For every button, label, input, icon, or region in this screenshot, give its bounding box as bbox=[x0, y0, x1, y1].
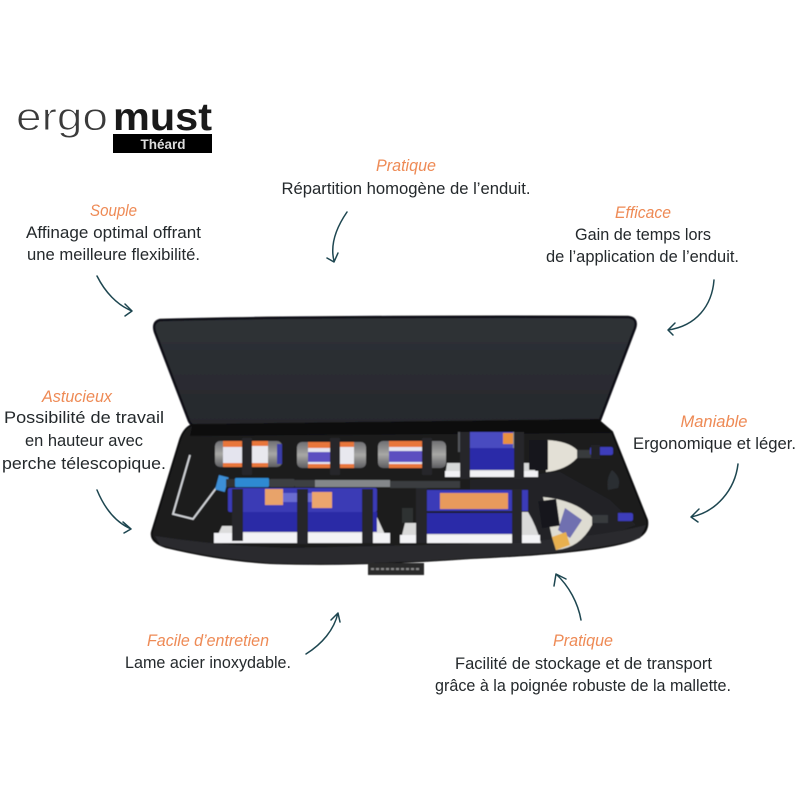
callout: Facile d'entretien: Facile d’entretien bbox=[147, 631, 269, 650]
arrow: Pratique répartition bbox=[327, 212, 347, 262]
arrow: Maniable bbox=[691, 464, 738, 522]
strap loop bbox=[608, 470, 619, 490]
logo: ergomust Théard: ergo bbox=[16, 96, 108, 139]
large spatula bbox=[538, 497, 633, 550]
callout: Efficace: Gain de temps lors bbox=[575, 225, 711, 244]
callout: Maniable: Maniable bbox=[680, 412, 748, 431]
large trowel right bbox=[400, 488, 541, 543]
callout: Souple: Souple bbox=[90, 201, 137, 220]
arrow: Astucieux bbox=[97, 490, 131, 533]
callout: Souple bbox=[26, 201, 201, 264]
logo: ergomust Théard: Théard bbox=[140, 137, 186, 152]
arrow: Pratique stockage bbox=[554, 574, 581, 620]
callout: Astucieux: perche télescopique. bbox=[2, 454, 166, 473]
callout: Pratique répartition: Pratique bbox=[376, 156, 436, 175]
paint rollers bbox=[215, 438, 446, 475]
logo: ergomust Théard: must bbox=[113, 96, 212, 139]
callout: Souple: Affinage optimal offrant bbox=[26, 223, 201, 242]
callout: Facile d'entretien bbox=[125, 631, 291, 672]
callout: Facile d'entretien: Lame acier inoxydable. bbox=[125, 653, 291, 672]
callout: Efficace bbox=[546, 203, 739, 266]
inner lining sheen bbox=[470, 472, 636, 546]
callout: Astucieux: Astucieux bbox=[41, 387, 112, 406]
callout: Souple: une meilleure flexibilité. bbox=[27, 245, 200, 264]
callout: Pratique stockage bbox=[435, 631, 731, 695]
callout: Pratique stockage: Pratique bbox=[553, 631, 613, 650]
callout: Astucieux: Possibilité de travail bbox=[4, 408, 164, 427]
roller frame bbox=[173, 455, 229, 519]
callout: Pratique répartition: Répartition homogène de l’enduit. bbox=[282, 179, 530, 198]
case lid bbox=[154, 317, 636, 427]
small spatula bbox=[529, 440, 613, 472]
small trowel bbox=[445, 432, 538, 479]
hinge band bbox=[190, 421, 612, 436]
callout: Efficace: Efficace bbox=[615, 203, 671, 222]
arrow: Facile d'entretien bbox=[306, 613, 340, 654]
case handle bbox=[368, 563, 424, 575]
front edge bbox=[155, 525, 646, 564]
arrow: Efficace bbox=[668, 280, 714, 335]
case base bbox=[152, 420, 647, 564]
telescopic pole bbox=[226, 478, 460, 488]
callout: Pratique stockage: Facilité de stockage et de transport bbox=[455, 654, 712, 673]
product photo: open tool case bbox=[152, 317, 647, 575]
callout: Astucieux: en hauteur avec bbox=[25, 431, 143, 450]
callout: Pratique stockage: grâce à la poignée robuste de la mallette. bbox=[435, 676, 731, 695]
callout: Maniable bbox=[633, 412, 796, 453]
callout: Maniable: Ergonomique et léger. bbox=[633, 434, 796, 453]
callout: Efficace: de l’application de l’enduit. bbox=[546, 247, 739, 266]
logo: ergomust Théard bbox=[16, 96, 212, 153]
callout: Pratique répartition bbox=[282, 156, 530, 198]
arrow: Souple bbox=[97, 276, 132, 316]
large trowel left bbox=[214, 488, 390, 544]
callout: Astucieux bbox=[2, 387, 166, 473]
